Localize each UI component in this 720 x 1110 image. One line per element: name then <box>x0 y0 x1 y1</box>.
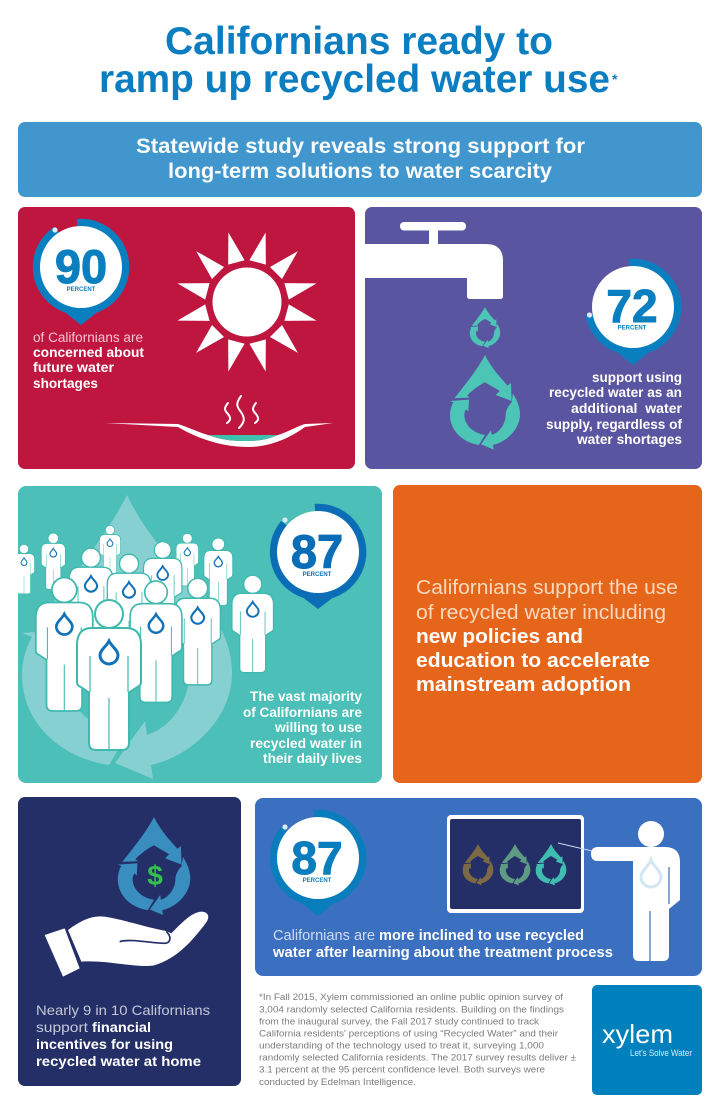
icon: recycling drop with dollar: $ <box>147 860 163 891</box>
icon: small recycling drop <box>470 307 500 348</box>
badge: 72 percent: PERCENT <box>618 326 647 332</box>
badge: 90 percent <box>37 223 126 325</box>
text: support using recycled water: supply, regardless of <box>546 416 682 432</box>
badge: 72 percent <box>587 263 678 365</box>
badge: 90 percent: 90 <box>55 240 107 293</box>
panel: learning about treatment <box>255 798 702 976</box>
text: support using recycled water: support using <box>592 369 682 385</box>
text: support for policies: Californians support the use <box>416 576 678 599</box>
banner text: Statewide study reveals strong support for <box>136 134 586 158</box>
footnote: from the inaugural survey, the Fall 2017 study continued to track <box>259 1016 540 1026</box>
text: concerned about shortages: shortages <box>33 375 98 391</box>
text: vast majority willing: recycled water in <box>250 736 362 751</box>
panel: financial incentives <box>18 797 241 1086</box>
icon: large recycling drop <box>450 355 520 450</box>
text: more inclined after learning: more inclined to use recycled <box>379 928 584 944</box>
text: more inclined after learning <box>272 928 613 961</box>
text: concerned about shortages: of Californians are <box>33 330 143 345</box>
logo: xylem <box>592 985 702 1095</box>
text: more inclined after learning: water after learning about the treatment process <box>272 945 613 961</box>
text: nearly 9 in 10: support <box>36 1019 88 1035</box>
title: * <box>612 71 618 87</box>
footnote: 3.1 percent at the 95 percent confidence level. Both surveys were <box>259 1065 545 1075</box>
text: vast majority willing: their daily lives <box>263 751 362 766</box>
icon: recycling drop with dollar <box>118 817 190 915</box>
footnote: conducted by Edelman Intelligence. <box>259 1077 416 1087</box>
text: concerned about shortages <box>33 330 144 391</box>
footnote: California residents' perceptions of using “Recycled Water” and their <box>259 1029 558 1039</box>
icon: crowd of people <box>14 526 273 749</box>
badge: 87 percent: 87 <box>291 525 343 578</box>
text: support using recycled water: recycled water as an <box>549 384 682 400</box>
footnote: understanding of the technology used to treat it, surveying 1,000 <box>259 1041 544 1051</box>
footnote: randomly selected California residents. The 2017 survey results deliver ± <box>259 1053 576 1063</box>
text: concerned about shortages: future water <box>33 359 115 375</box>
text: support using recycled water: additional water <box>571 400 683 416</box>
icon: presenter <box>591 821 680 961</box>
text: support for policies: mainstream adoption <box>416 673 631 696</box>
text: support for policies: of recycled water including <box>416 601 666 624</box>
footnote: *In Fall 2015, Xylem commissioned an online public opinion survey of <box>259 992 564 1002</box>
icon: dried basin <box>105 396 333 447</box>
icon: background recycling drop <box>22 495 232 779</box>
logo: xylem: Let's Solve Water <box>630 1048 692 1059</box>
footnote: 3,004 randomly selected California residents. Building on the findings <box>259 1004 565 1014</box>
icon: faucet <box>356 222 503 299</box>
text: more inclined after learning: Californians are <box>273 928 375 944</box>
icon: open hand <box>45 912 208 977</box>
badge: 87 percent <box>274 507 363 609</box>
text: vast majority willing <box>243 689 362 766</box>
badge: 87 percent: 87 <box>291 832 343 884</box>
panel: policies and education <box>393 485 702 783</box>
badge: 72 percent: 72 <box>606 280 658 332</box>
text: support using recycled water <box>546 369 683 447</box>
icon: sun <box>175 230 319 374</box>
banner: statewide study <box>18 122 702 197</box>
banner text <box>136 134 586 183</box>
text: vast majority willing: of Californians are <box>243 705 362 720</box>
text: concerned about shortages: concerned about <box>33 344 144 360</box>
panel: 72 percent support <box>356 207 702 469</box>
title: Californians ready to <box>165 20 553 63</box>
title <box>99 20 618 101</box>
panel: 87 percent willing <box>14 486 382 783</box>
text: nearly 9 in 10: financial <box>92 1019 151 1035</box>
badge: 87 percent: PERCENT <box>303 572 332 578</box>
title: ramp up recycled water use <box>99 58 610 101</box>
text: nearly 9 in 10 <box>36 1002 210 1069</box>
badge: 90 percent: PERCENT <box>67 287 96 293</box>
text: support for policies: new policies and <box>416 625 583 648</box>
icon: presentation board <box>447 815 592 913</box>
panel: 90 percent concerned <box>18 207 355 469</box>
text: vast majority willing: The vast majority <box>250 689 362 704</box>
text: nearly 9 in 10: Nearly 9 in 10 Californians <box>36 1002 210 1018</box>
badge: 87 percent <box>274 814 363 916</box>
banner text: long-term solutions to water scarcity <box>168 159 552 183</box>
badge: 87 percent: PERCENT <box>303 878 332 884</box>
logo: xylem: xylem <box>602 1019 673 1049</box>
text: nearly 9 in 10: recycled water at home <box>36 1053 201 1069</box>
text: nearly 9 in 10: incentives for using <box>36 1036 173 1052</box>
footnote <box>259 992 576 1087</box>
text: support for policies: education to accelerate <box>416 649 650 672</box>
text: support for policies <box>416 576 678 696</box>
text: vast majority willing: willing to use <box>274 720 362 735</box>
text: support using recycled water: water shortages <box>576 431 682 447</box>
